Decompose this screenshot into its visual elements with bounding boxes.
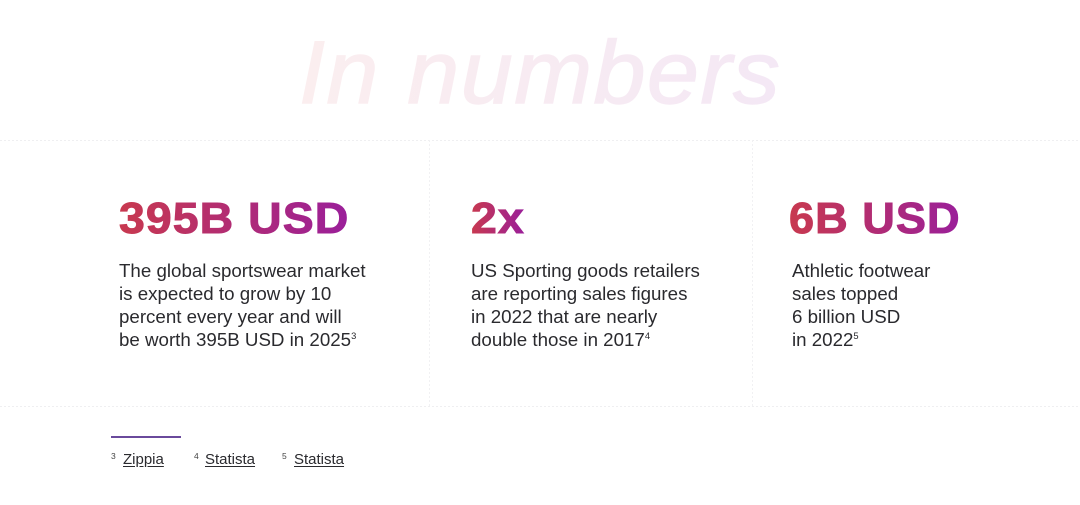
stat: 395B USD: 395B USD: [119, 194, 349, 243]
text: sporting goods retailers: are reporting sales figures: [471, 284, 687, 304]
panel: 6B USD: [789, 194, 961, 350]
text: sportswear market: [119, 261, 366, 350]
footnote 3: Zippia: [123, 451, 164, 468]
text: sporting goods retailers: [471, 261, 700, 350]
panel: 395B USD: [119, 194, 366, 350]
text: athletic footwear: sales topped: [792, 284, 898, 304]
footnote 3: 3: [111, 451, 116, 461]
text: sportswear market: The global sportswear market: [119, 261, 366, 281]
footnote 5: 5: [282, 451, 287, 461]
text: sportswear market: percent every year and will: [119, 307, 342, 327]
text: athletic footwear: Athletic footwear: [792, 261, 930, 281]
text: sporting goods retailers: US Sporting goods retailers: [471, 261, 700, 281]
panel: 2x: [471, 194, 700, 350]
text: sporting goods retailers: double those in 20174: [471, 330, 650, 350]
footnotes: [111, 451, 344, 468]
footnote 4: 4: [194, 451, 199, 461]
text: sportswear market: is expected to grow by 10: [119, 284, 331, 304]
text: athletic footwear: in 20225: [792, 330, 859, 350]
footnote 4: Statista: [205, 451, 255, 468]
footnote 5: Statista: [294, 451, 344, 468]
title: In numbers: [299, 22, 781, 122]
text: sportswear market: be worth 395B USD in 20253: [119, 330, 356, 350]
stat: 2x: 2x: [471, 194, 525, 243]
stat: 6B USD: 6B USD: [789, 194, 961, 243]
text: sporting goods retailers: in 2022 that are nearly: [471, 307, 657, 327]
footnote rule: [111, 436, 181, 438]
text: athletic footwear: [792, 261, 930, 350]
text: athletic footwear: 6 billion USD: [792, 307, 900, 327]
